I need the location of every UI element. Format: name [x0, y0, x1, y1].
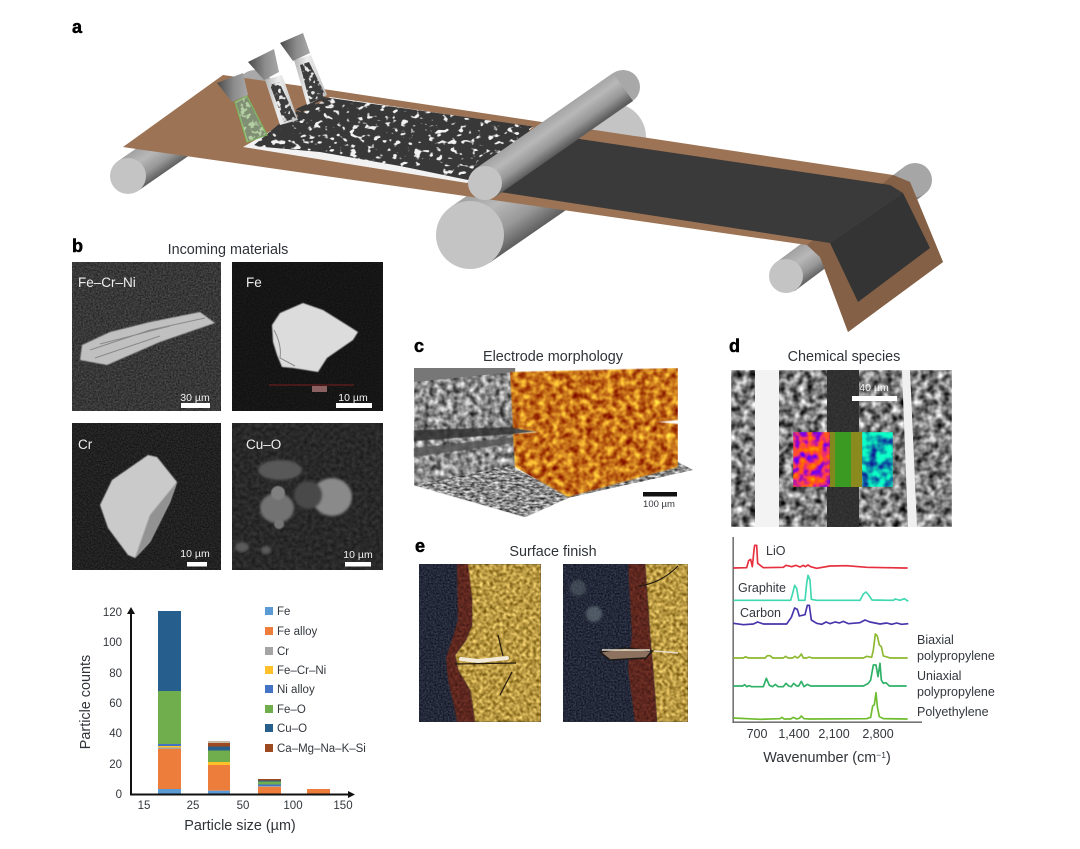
SEM image Cu-O: Cu–O: [246, 437, 281, 452]
curve labels: [738, 544, 995, 719]
white separator band: [755, 370, 779, 527]
panel label a: a: [72, 17, 83, 37]
bar 25-50: [208, 741, 230, 794]
dark central current collector: [827, 370, 859, 527]
hopper with green material: [217, 73, 267, 142]
chart legend: Cr: [277, 646, 289, 658]
heading: incoming materials: Incoming materials: [168, 242, 288, 258]
optical image left: [419, 564, 541, 722]
x axis tick labels: 15: [138, 800, 150, 812]
chart legend: Ni alloy: [277, 684, 315, 696]
heading: electrode morphology: Electrode morphology: [483, 349, 624, 365]
dark coating on bend: [830, 193, 930, 302]
grey slice face: [414, 368, 570, 517]
x axis title: Particle size (µm): [184, 818, 296, 834]
y axis title: Particle counts: [78, 655, 94, 749]
LiO curve: [733, 545, 908, 568]
x tick labels: [747, 727, 894, 741]
curve labels: Polyethylene: [917, 705, 989, 719]
orange rendered block: [510, 368, 678, 497]
stacked bar chart: particle counts: [78, 606, 366, 834]
x tick labels: 2,100: [818, 727, 850, 741]
right white band: [902, 370, 917, 527]
y axis tick labels: 80: [109, 668, 122, 680]
SEM grey background: [731, 370, 952, 527]
green and olive map: [830, 432, 862, 487]
curve labels: polypropylene: [917, 649, 995, 663]
curve labels: Uniaxial: [917, 669, 961, 683]
chart axes: [127, 607, 355, 798]
rear hopper: [280, 33, 327, 105]
SEM image Fe-Cr-Ni: 30 µm: [180, 392, 210, 404]
optical image right: [563, 564, 688, 722]
SEM image Cr: Cr: [78, 437, 93, 452]
x tick labels: 2,800: [862, 727, 894, 741]
SEM image Fe: [232, 262, 383, 411]
y axis tick labels: 120: [103, 607, 122, 619]
SEM image Fe-Cr-Ni: Fe–Cr–Ni: [78, 275, 136, 290]
panel a: roll-to-roll coating line: [110, 33, 943, 332]
calender top roller: [468, 70, 640, 200]
bar 50-100: [258, 779, 281, 794]
SEM image Cr: [72, 423, 221, 570]
curve labels: LiO: [766, 544, 786, 558]
right roller: [769, 163, 932, 293]
scale bar: [852, 396, 897, 401]
panel label b: b: [72, 236, 83, 256]
particle slurry bed: [253, 97, 537, 180]
SEM image Cu-O: 10 µm: [343, 549, 373, 561]
y axis tick labels: 0: [116, 789, 122, 801]
bar 15-25: [158, 611, 181, 794]
bent end of the foil: [807, 175, 943, 332]
large lower roller: [436, 103, 646, 269]
top dark band of the slice: [414, 368, 515, 382]
curve labels: Carbon: [740, 606, 781, 620]
x axis tick labels: 50: [237, 800, 249, 812]
middle hopper: [248, 49, 298, 125]
red and blue map: [793, 432, 830, 487]
x axis tick labels: 25: [187, 800, 199, 812]
curve labels: Biaxial: [917, 633, 954, 647]
SEM image Fe: Fe: [246, 275, 262, 290]
x axis title: ): [886, 750, 891, 766]
y axis tick labels: [103, 607, 122, 801]
dark dried coating: [500, 138, 903, 243]
Raman map over SEM image: [731, 370, 952, 527]
panel label d: d: [729, 336, 740, 356]
curve labels: polypropylene: [917, 685, 995, 699]
panel label c: c: [414, 336, 424, 356]
bar 100-150: [307, 789, 330, 794]
chart legend: Fe–Cr–Ni: [277, 665, 326, 677]
x axis tick labels: 100: [283, 800, 303, 812]
chart legend: Fe–O: [277, 704, 306, 716]
x axis tick labels: 150: [333, 800, 353, 812]
y axis tick labels: 100: [103, 637, 122, 649]
axes: [732, 537, 922, 723]
Raman spectra chart: [732, 537, 995, 766]
panel label e: e: [415, 536, 425, 556]
y axis tick labels: 20: [109, 759, 122, 771]
cyan and blue map: [862, 432, 893, 487]
x axis title: Wavenumber (cm: [763, 750, 876, 766]
SEM image Fe-Cr-Ni: [72, 262, 221, 411]
3D electrode tomography image: [414, 368, 693, 517]
scale label: 40 µm: [859, 382, 889, 394]
chart legend: [265, 606, 366, 755]
crack band in the slice: [414, 427, 538, 441]
y axis tick labels: 40: [109, 728, 122, 740]
spectra curves: [733, 545, 908, 719]
curve labels: Graphite: [738, 581, 786, 595]
heading: surface finish: Surface finish: [509, 544, 597, 560]
biaxial polypropylene curve: [733, 634, 908, 658]
graphite curve: [733, 575, 908, 601]
brown current collector foil: [123, 75, 943, 332]
SEM image Cr: 10 µm: [180, 548, 210, 560]
chart legend: Cu–O: [277, 723, 307, 735]
scale label: 100 µm: [643, 499, 675, 510]
polyethylene curve: [733, 693, 908, 719]
grey floor plane: [414, 466, 570, 517]
carbon curve: [733, 605, 908, 625]
SEM image Cu-O: [232, 423, 383, 570]
x tick labels: 1,400: [778, 727, 810, 741]
x axis tick labels: [138, 800, 353, 812]
uniaxial polypropylene curve: [733, 663, 907, 687]
x axis title: −1: [876, 750, 886, 760]
lower grey band in the slice: [414, 437, 515, 457]
chart legend: Fe: [277, 606, 290, 618]
SEM image Fe: 10 µm: [338, 392, 368, 404]
heading: chemical species: Chemical species: [788, 349, 900, 365]
chart legend: Fe alloy: [277, 626, 318, 638]
y axis tick labels: 60: [109, 698, 122, 710]
x tick labels: 700: [747, 727, 767, 741]
white uncoated strip: [243, 97, 533, 183]
back left roller: [110, 70, 273, 194]
chart legend: Ca–Mg–Na–K–Si: [277, 743, 366, 755]
scale bar: [643, 492, 677, 496]
